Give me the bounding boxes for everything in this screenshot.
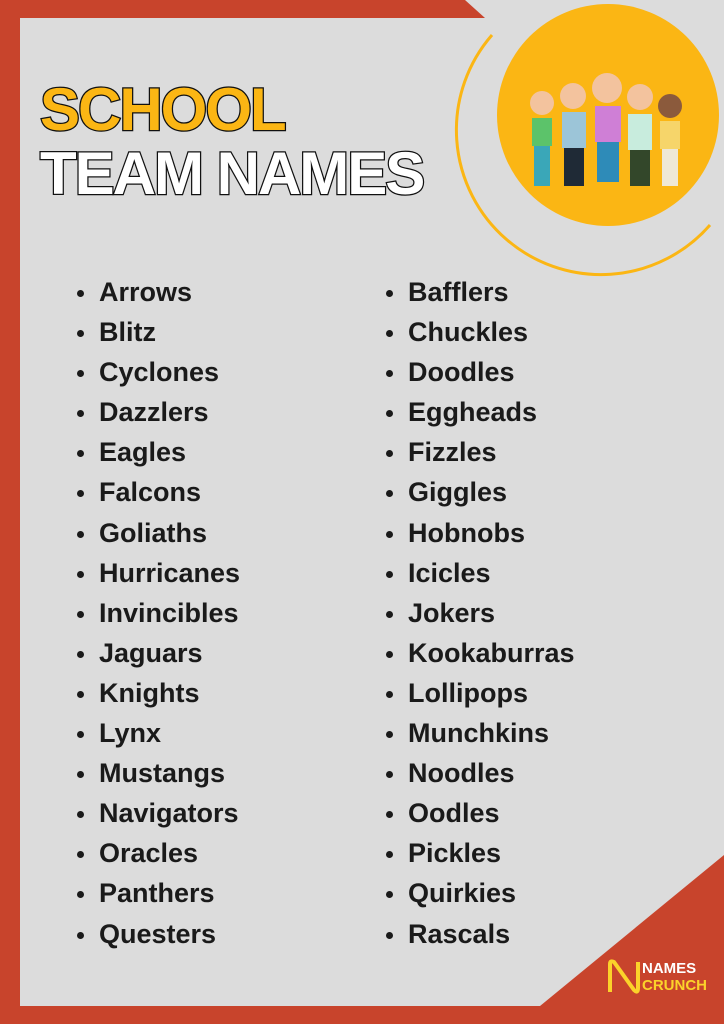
logo: NAMES (642, 960, 696, 977)
list: left column: Panthers (99, 878, 215, 908)
logo (608, 959, 707, 994)
title: TEAM NAMES (40, 140, 423, 207)
list: right column: Noodles (408, 758, 515, 788)
list: right column: Chuckles (408, 317, 528, 347)
list: left column: Arrows (99, 277, 192, 307)
list: left column: Hurricanes (99, 558, 240, 588)
list: right column (386, 277, 575, 948)
list: right column: Lollipops (408, 678, 528, 708)
illustration: kids in yellow circle (454, 4, 719, 276)
title (39, 76, 424, 207)
list: left column: Goliaths (99, 518, 207, 548)
list: left column: Mustangs (99, 758, 225, 788)
list: left column: Lynx (99, 718, 161, 748)
list: right column: Jokers (408, 598, 495, 628)
list: right column: Doodles (408, 357, 515, 387)
list: left column: Knights (99, 678, 200, 708)
list: left column: Oracles (99, 838, 198, 868)
list: left column: Eagles (99, 437, 186, 467)
list: right column: Giggles (408, 477, 507, 507)
list: left column: Invincibles (99, 598, 239, 628)
list: right column: Pickles (408, 838, 501, 868)
list: right column: Bafflers (408, 277, 509, 307)
list: left column (77, 277, 240, 948)
list: right column: Fizzles (408, 437, 497, 467)
list: right column: Munchkins (408, 718, 549, 748)
list: left column: Dazzlers (99, 397, 209, 427)
list: right column: Oodles (408, 798, 500, 828)
list: right column: Kookaburras (408, 638, 575, 668)
list: left column: Cyclones (99, 357, 219, 387)
list: left column: Questers (99, 918, 216, 948)
list: left column: Falcons (99, 477, 201, 507)
logo: CRUNCH (642, 977, 707, 994)
list: left column: Navigators (99, 798, 239, 828)
list: right column: Rascals (408, 918, 510, 948)
list: left column: Blitz (99, 317, 156, 347)
title: SCHOOL (40, 76, 285, 143)
list: left column: Jaguars (99, 638, 203, 668)
list: right column: Quirkies (408, 878, 516, 908)
list: right column: Eggheads (408, 397, 537, 427)
list: right column: Icicles (408, 558, 491, 588)
list: right column: Hobnobs (408, 518, 525, 548)
